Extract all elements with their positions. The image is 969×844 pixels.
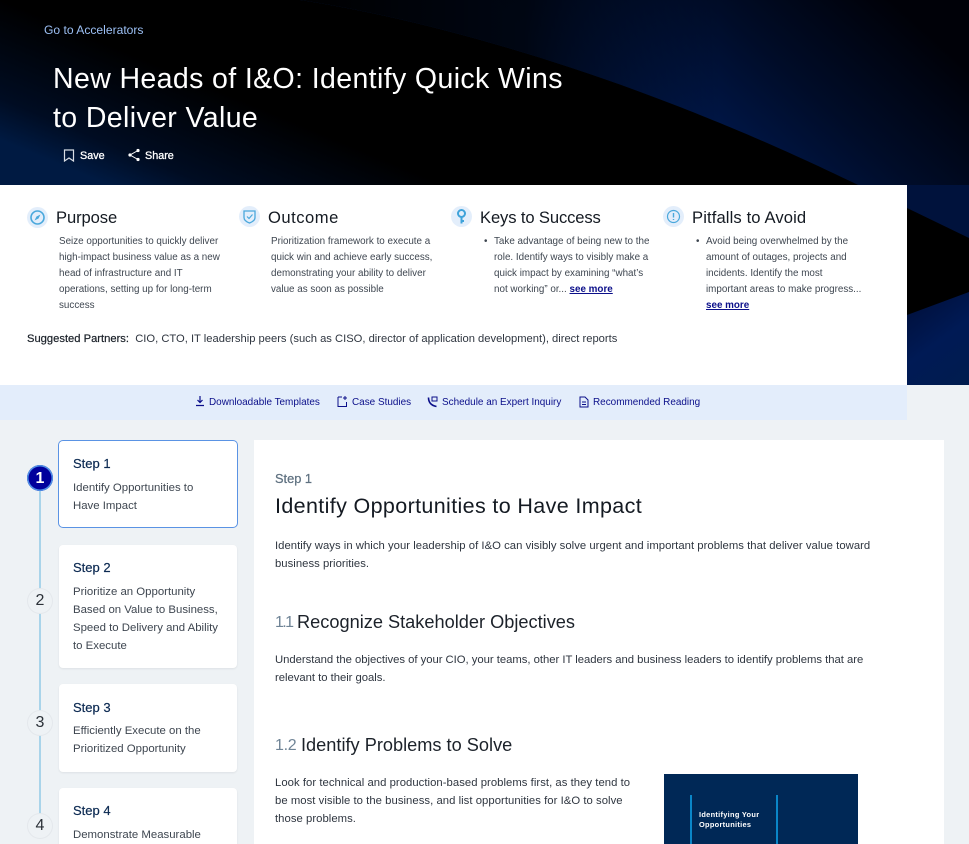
card: step 3	[59, 684, 237, 772]
text: 1.1	[275, 654, 863, 684]
figure: identifying your opportunities	[664, 774, 858, 844]
text: 1.2	[275, 777, 630, 825]
action: share: Share	[145, 150, 174, 162]
text: pitfalls to avoid: incidents. Identify the most	[706, 268, 823, 279]
link: downloadable templates: Downloadable Templates	[209, 397, 320, 408]
card: step 2: Based on Value to Business,	[73, 604, 218, 616]
action: save	[64, 149, 105, 162]
link: case studies: Case Studies	[352, 397, 411, 408]
text: pitfalls to avoid: •	[696, 236, 699, 247]
icon: compass	[27, 207, 48, 228]
step marker 3: 3	[36, 714, 44, 731]
text: purpose: high-impact business value as a new	[59, 252, 220, 263]
text: pitfalls to avoid: important areas to make progress...	[706, 284, 861, 295]
heading: 1.2: Identify Problems to Solve	[301, 735, 512, 755]
text: keys to success: role. Identify ways to visibly make a	[494, 252, 648, 263]
text: suggested partners: Suggested Partners: CIO, CTO, IT leadership peers (such as CISO, director of application development), direct reports	[27, 333, 617, 345]
text: intro: Identify ways in which your leadership of I&O can visibly solve urgent and important problems that deliver value toward	[275, 540, 870, 552]
text: 1.2: be most visible to the business, and list opportunities for I&O to solve	[275, 795, 623, 807]
label: step 1: Step 1	[275, 471, 312, 486]
icon: key	[451, 206, 472, 227]
text: pitfalls to avoid: see more	[706, 300, 749, 311]
card: step 1	[59, 441, 237, 527]
text: keys to success	[484, 236, 649, 295]
resource link bar	[0, 385, 907, 420]
card: step 1: Identify Opportunities to	[73, 482, 193, 494]
text: outcome: demonstrating your ability to deliver	[271, 268, 426, 279]
panel: step detail	[254, 440, 944, 844]
panel: overview	[0, 185, 907, 385]
card: step 2: Prioritize an Opportunity	[73, 586, 195, 598]
link: schedule an expert inquiry: Schedule an Expert Inquiry	[442, 397, 561, 408]
text: outcome: Prioritization framework to execute a	[271, 236, 430, 247]
card: step 4	[59, 788, 237, 844]
icon: shield	[239, 206, 260, 227]
card: step 2: Step 2	[73, 560, 111, 575]
card: step 3: Step 3	[73, 700, 111, 715]
card: step 2: Speed to Delivery and Ability	[73, 622, 218, 634]
figure: identifying your opportunities: Opportunities	[699, 820, 751, 828]
text: 1.1: relevant to their goals.	[275, 672, 386, 684]
step marker 2: 2	[36, 592, 44, 609]
text: keys to success: not working” or... see more	[494, 284, 613, 295]
text: purpose	[59, 236, 220, 311]
text: 1.2: Look for technical and production-based problems first, as they tend to	[275, 777, 630, 789]
icon: alert	[663, 206, 684, 227]
text: pitfalls to avoid: Avoid being overwhelmed by the	[706, 236, 848, 247]
title: to Deliver Value	[53, 102, 258, 134]
card: step 3: Prioritized Opportunity	[73, 743, 186, 755]
step marker 1: 1	[36, 470, 44, 487]
action: save: Save	[80, 150, 105, 162]
text: outcome	[271, 236, 432, 295]
step marker 4	[28, 814, 52, 838]
text: pitfalls to avoid	[696, 236, 861, 311]
step connector line	[39, 490, 41, 815]
step marker 1	[27, 465, 53, 491]
card: step 2: to Execute	[73, 640, 127, 652]
heading: 1.1: Recognize Stakeholder Objectives	[297, 612, 575, 632]
card: step 3: Efficiently Execute on the	[73, 725, 201, 737]
text: purpose: success	[59, 300, 95, 311]
hero background	[0, 0, 969, 385]
figure: identifying your opportunities: Identifying Your	[699, 810, 759, 819]
text: intro	[275, 540, 870, 570]
card: step 2	[59, 545, 237, 668]
action: share	[128, 148, 174, 162]
card: step 1: Step 1	[73, 456, 111, 471]
text: purpose: operations, setting up for long-term	[59, 284, 212, 295]
text: purpose: Seize opportunities to quickly deliver	[59, 236, 218, 247]
heading: outcome: Outcome	[268, 208, 339, 227]
step marker 2	[28, 589, 52, 613]
text: 1.2: those problems.	[275, 813, 356, 825]
title: New Heads of I&O: Identify Quick Wins	[53, 63, 563, 95]
card: step 4: Demonstrate Measurable	[73, 829, 201, 841]
text: purpose: head of infrastructure and IT	[59, 268, 183, 279]
text: 1.1: Understand the objectives of your CIO, your teams, other IT leaders and business leaders to identify problems that are	[275, 654, 863, 666]
heading: purpose: Purpose	[56, 208, 117, 227]
heading: 1.2: 1.2	[275, 737, 296, 754]
text: pitfalls to avoid: amount of outages, projects and	[706, 252, 847, 263]
text: keys to success: quick impact by examining “what’s	[494, 268, 643, 279]
text: outcome: quick win and achieve early success,	[271, 252, 432, 263]
text: keys to success: •	[484, 236, 487, 247]
title	[53, 63, 563, 134]
step marker 4: 4	[36, 817, 44, 834]
card: step 1: Have Impact	[73, 500, 137, 512]
link: recommended reading: Recommended Reading	[593, 397, 700, 408]
heading: keys to success: Keys to Success	[480, 208, 601, 227]
breadcrumb link: Go to Accelerators	[44, 23, 143, 37]
text: intro: business priorities.	[275, 558, 369, 570]
card: step 4: Step 4	[73, 803, 111, 818]
heading: pitfalls to avoid: Pitfalls to Avoid	[692, 208, 806, 227]
text: keys to success: Take advantage of being new to the	[494, 236, 649, 247]
step marker 3	[28, 711, 52, 735]
heading: identify opportunities: Identify Opportunities to Have Impact	[275, 494, 642, 518]
text: outcome: value as soon as possible	[271, 284, 384, 295]
heading: 1.1: 1.1	[275, 614, 292, 631]
